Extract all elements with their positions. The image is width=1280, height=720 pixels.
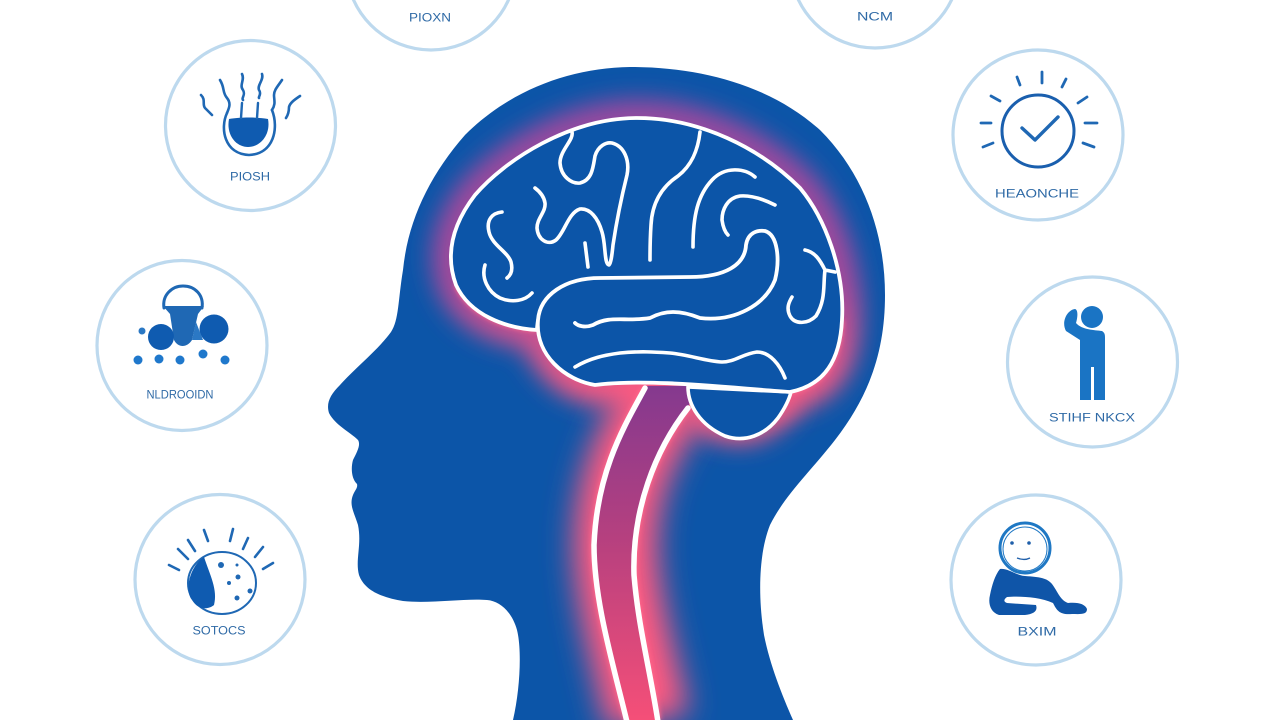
brain outline (451, 118, 842, 392)
inner arched fold (722, 196, 775, 235)
badge label: SOTOCS (192, 624, 246, 638)
brain folds (484, 132, 835, 378)
icon: steaming bowl (201, 74, 300, 155)
icon badge: person at desk (951, 495, 1121, 665)
icon: person resting arm (989, 523, 1087, 615)
icon: respirator and particles (134, 286, 230, 364)
badge label: BXIM (1018, 624, 1056, 638)
right hook fold (788, 250, 835, 322)
icon: check mark with rays (981, 72, 1097, 167)
central sulcus (650, 132, 700, 260)
badge label: STIHF NKCX (1049, 410, 1135, 424)
icon: person holding neck (1064, 306, 1105, 400)
icon badge: top right (790, 0, 960, 48)
badge label: NCM (857, 10, 893, 24)
short fold (585, 243, 588, 267)
badge label: PIOXN (409, 10, 451, 24)
badge label: NLDROOIDN (146, 388, 214, 402)
icon: spotted sphere with rays (169, 529, 273, 614)
icon badge: stiff neck (1008, 277, 1178, 447)
head silhouette (328, 67, 885, 720)
icon badge: spotted head (135, 494, 305, 664)
icon badge: top left (346, 0, 516, 50)
left C fold (484, 265, 532, 301)
spinal cord (594, 386, 695, 720)
top central winding fold (535, 132, 628, 265)
arched fold (693, 170, 755, 247)
icon badge: steam bowl (166, 40, 336, 210)
icon badge: check sun (953, 50, 1123, 220)
nerve glow (451, 118, 842, 720)
lower temporal fold (575, 352, 785, 378)
badge label: HEAONCHE (995, 186, 1079, 200)
head illustration (328, 67, 885, 720)
badge label: PIOSH (230, 170, 270, 184)
left S fold (488, 212, 512, 278)
icon badge: mask (97, 260, 267, 430)
cerebellum (688, 387, 791, 439)
